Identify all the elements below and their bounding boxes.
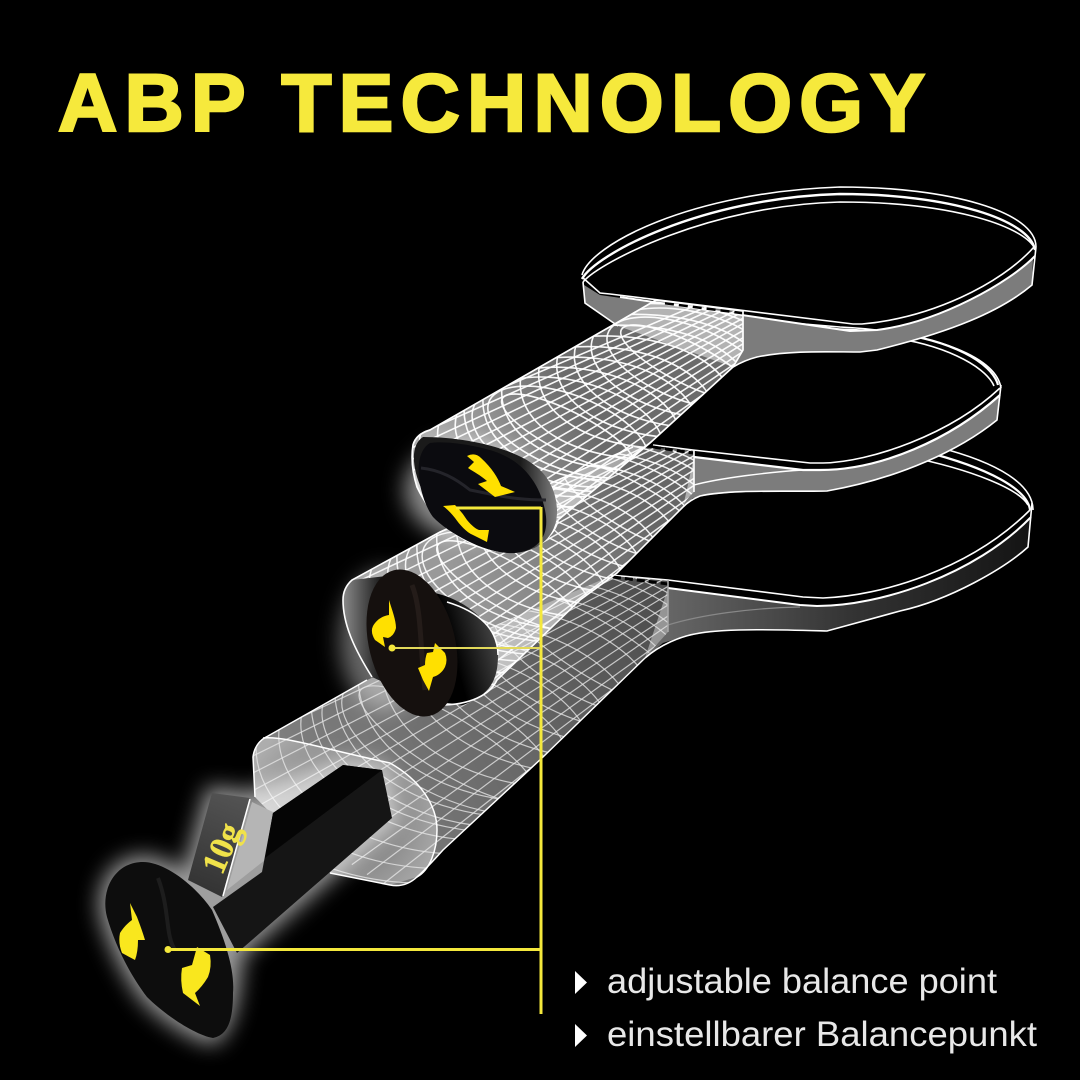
handle 1 wireframe <box>411 299 744 552</box>
handle 3 mesh <box>254 576 668 884</box>
title: ABP TECHNOLOGY <box>58 58 925 149</box>
handle 3 body <box>253 575 668 886</box>
paddle 2 rim band <box>683 395 1000 507</box>
weight plate <box>188 793 250 897</box>
disc 1 ridge <box>421 468 546 500</box>
balance point callout lines <box>164 507 541 1014</box>
handle 1 mesh <box>413 303 742 528</box>
english feature text: adjustable balance point <box>607 962 997 1001</box>
glow around weight insert <box>105 765 392 1038</box>
icon: rotate arrow upper <box>467 454 515 497</box>
paddle 3 rim band <box>645 517 1030 658</box>
feature list <box>575 962 1037 1054</box>
handle 2 right opening <box>425 592 498 705</box>
end cap disc 3 <box>105 862 233 1038</box>
handle 2 wireframe <box>342 446 695 706</box>
handle 1 outline <box>412 300 743 552</box>
disc 3 ridge <box>158 878 175 950</box>
weight label: 10g <box>195 818 249 879</box>
paddle 1 rim band <box>584 258 1033 367</box>
icon: rotate arrow left <box>372 600 396 647</box>
disc 2 face <box>352 560 472 726</box>
paddle 3 outlines <box>610 447 1033 658</box>
stick channel <box>265 765 382 858</box>
glow behind upper end caps <box>340 440 535 710</box>
handle 2 mesh <box>362 447 694 686</box>
bullet 2 <box>575 1024 587 1047</box>
weight stick insert <box>188 765 392 953</box>
icon: rotate arrow upper <box>119 903 145 960</box>
disc 1 rim <box>414 437 557 553</box>
marker dot disc 2 <box>388 644 396 652</box>
paddle 2 (middle) <box>653 319 1001 507</box>
icon: rotate arrow right <box>418 643 446 691</box>
handle 3 wireframe <box>252 576 669 886</box>
handle 3 outline <box>253 580 668 886</box>
handle 2 end strip <box>653 447 693 453</box>
marker dot disc 3 <box>164 946 172 953</box>
bullet 1 <box>575 971 587 994</box>
handle 2 outline <box>343 447 694 705</box>
paddle 1 outlines <box>582 187 1036 367</box>
german feature text: einstellbarer Balancepunkt <box>607 1015 1037 1054</box>
leader to disc 3 <box>168 948 541 951</box>
disc 3 face <box>105 862 233 1038</box>
icon: rotate arrow lower <box>443 505 489 542</box>
end cap disc 2 <box>352 560 472 726</box>
icon: rotate arrow lower <box>181 947 211 1006</box>
handle 2 body <box>343 447 694 705</box>
paddle 1 (top) <box>582 187 1036 367</box>
handle 3 front cap <box>253 738 437 885</box>
disc 1 face <box>419 442 546 553</box>
handle 2 left interior <box>343 575 400 690</box>
leader to disc 2 <box>392 647 541 649</box>
handle 3 end strip <box>613 577 668 584</box>
weight edge highlight <box>223 799 250 896</box>
weight silver side <box>227 802 275 890</box>
disc 2 ridge <box>412 585 425 690</box>
handle 1 end strip <box>665 303 743 313</box>
stick body <box>213 765 392 953</box>
paddle 2 outlines <box>653 319 1001 507</box>
leader to disc 1 <box>456 506 541 510</box>
vertical leader <box>540 507 542 1014</box>
paddle 3 (lowest) <box>610 447 1033 658</box>
handle 1 body <box>412 300 743 552</box>
end cap disc 1 <box>414 437 557 553</box>
